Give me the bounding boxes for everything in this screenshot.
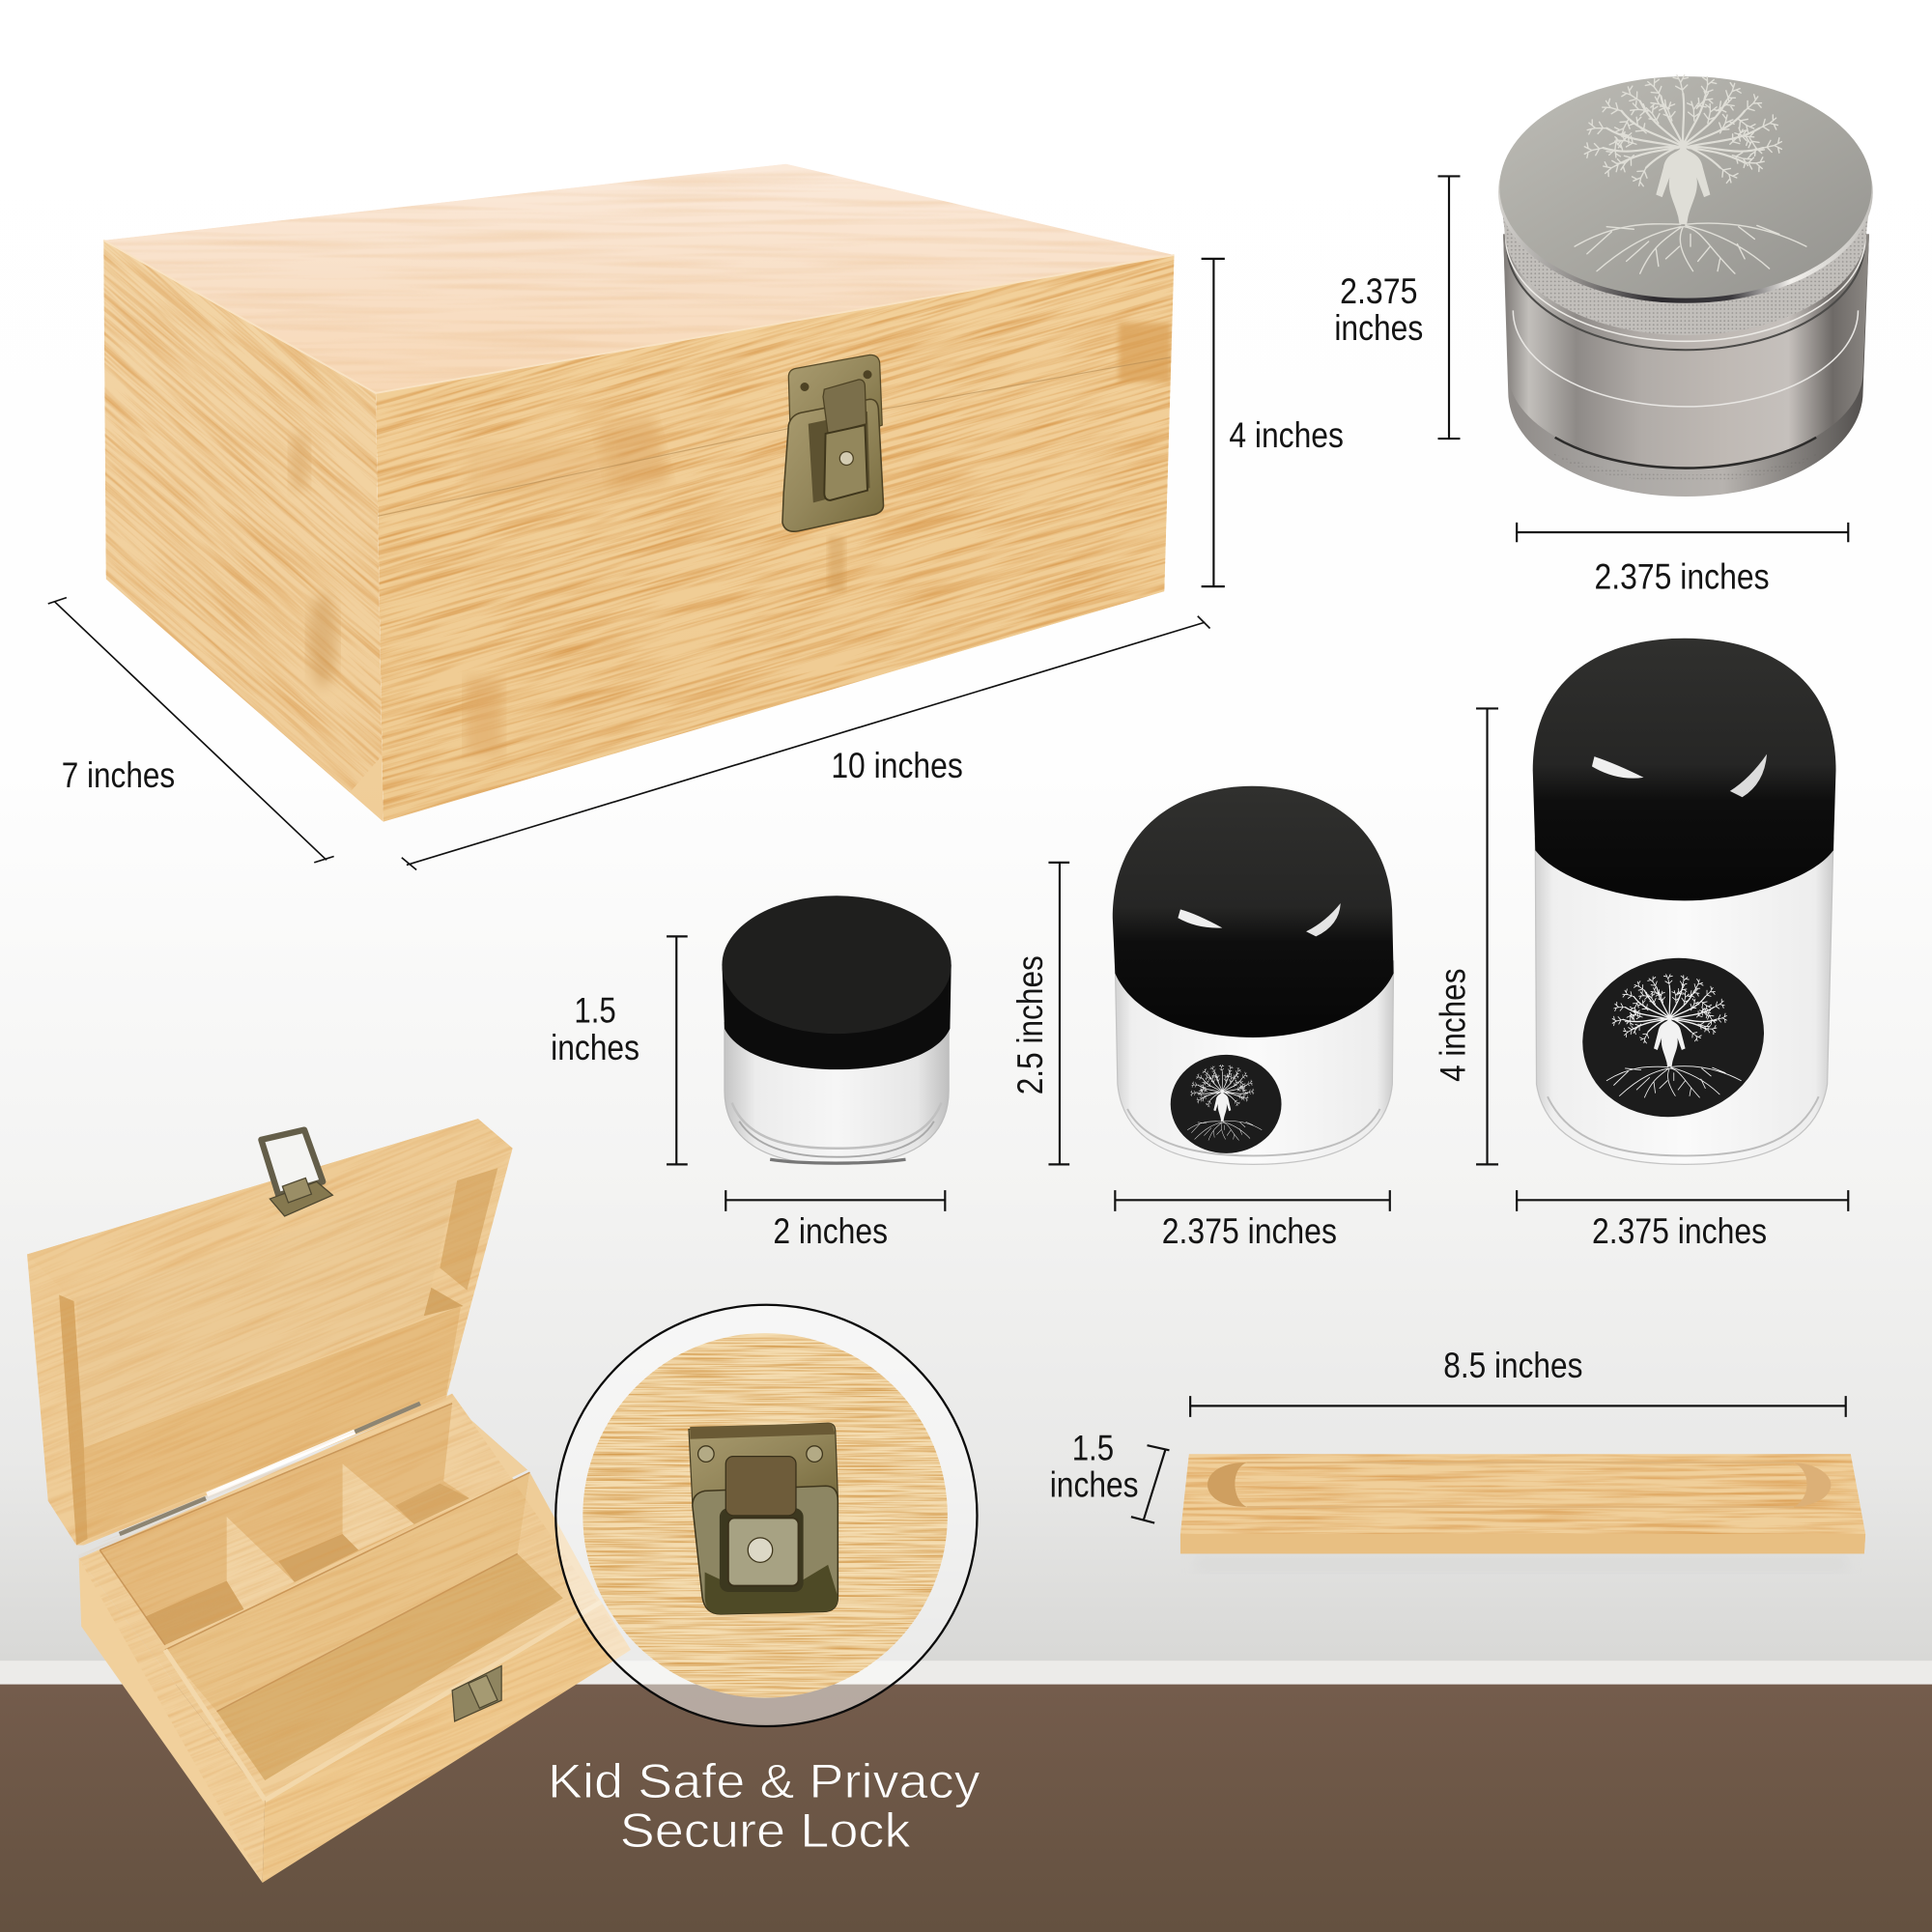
- latch body: [782, 399, 884, 531]
- magnifier bamboo: [579, 1331, 952, 1700]
- dimension: medium jar width: 2.375 inches: [1162, 1211, 1337, 1251]
- tray body: [1180, 1454, 1865, 1553]
- hinges: [120, 1404, 420, 1534]
- latch hasp: [823, 380, 867, 434]
- front lock: [452, 1665, 501, 1721]
- bamboo tray: [1180, 1454, 1866, 1553]
- skirting stripe: [0, 1661, 1932, 1685]
- closeup body wear: [705, 1565, 838, 1614]
- partition 1: [227, 1517, 295, 1609]
- tray shadow: [1195, 1555, 1848, 1573]
- long divider wall: [165, 1472, 529, 1712]
- grinder engraved tree: [1575, 75, 1806, 273]
- caption line 1: Kid Safe & Privacy: [548, 1754, 980, 1808]
- dimension: grinder width: 2.375 inches: [1595, 557, 1770, 597]
- dimension: small jar height: 1.5: [574, 991, 616, 1031]
- large jar: [1533, 639, 1836, 1164]
- dimension: small jar width: 2 inches: [773, 1211, 888, 1251]
- closed bamboo box: [0, 0, 1452, 1091]
- brown footer band: [0, 1685, 1932, 1932]
- lid rim top: [27, 1119, 513, 1301]
- compartment 3 floor: [395, 1484, 469, 1524]
- compartment 1 floor: [146, 1580, 244, 1645]
- box latch: [782, 355, 884, 531]
- medium jar cap: [1113, 786, 1394, 1037]
- small jar glass: [724, 1023, 949, 1164]
- small jar cap: [722, 965, 952, 1069]
- latch screws: [805, 375, 867, 387]
- grinder base: [1503, 234, 1869, 497]
- dimension: large jar width: [1517, 1190, 1848, 1251]
- long compartment floor: [216, 1553, 563, 1780]
- dimension: tray width: [1050, 1428, 1169, 1523]
- grinder seam lines: [1555, 438, 1816, 469]
- dimension: tray length: [1190, 1346, 1846, 1417]
- tray front edge: [1180, 1534, 1865, 1553]
- lid edge highlights: [103, 241, 1175, 393]
- medium jar highlights: [1178, 909, 1222, 928]
- closeup latch: [689, 1423, 838, 1614]
- lid inner right wall: [440, 1168, 497, 1290]
- closeup screw: [748, 1538, 773, 1562]
- large jar label: [1568, 942, 1778, 1133]
- dimension: small jar height: inches: [551, 1028, 639, 1067]
- magnifier circle: lock closeup: [555, 1305, 977, 1726]
- closeup plate: [689, 1423, 838, 1503]
- dimension: medium jar width: [1115, 1190, 1390, 1251]
- dimension: small jar height: [551, 936, 688, 1164]
- medium jar label: [1171, 1055, 1282, 1153]
- dimension: box depth: 7 inches: [62, 755, 175, 795]
- lid clasp: [261, 1130, 332, 1216]
- dimension: small jar width: [725, 1190, 945, 1251]
- hinge gap: [207, 1432, 355, 1494]
- dimension: tray length: 8.5 inches: [1443, 1346, 1582, 1385]
- latch screw: [839, 451, 853, 466]
- dimension: box depth: [48, 598, 334, 863]
- dimension: box length: 10 inches: [831, 746, 963, 785]
- caption line 2: Secure Lock: [620, 1804, 911, 1858]
- dimension: grinder height: [1334, 176, 1460, 439]
- caption: [548, 1754, 980, 1858]
- dimension: grinder height: inches: [1334, 308, 1423, 348]
- compartment 2 floor: [278, 1534, 358, 1582]
- large jar glass: [1535, 838, 1833, 1164]
- box top lid: [103, 164, 1175, 393]
- latch inner channel: [809, 412, 870, 502]
- upper compartments back wall: [99, 1404, 527, 1645]
- large jar cap: [1533, 639, 1836, 900]
- box left face: [103, 242, 383, 821]
- dimension: box length: [402, 616, 1210, 870]
- large jar highlights: [1592, 756, 1644, 779]
- closeup body: [693, 1486, 838, 1614]
- dimension: tray width: inches: [1050, 1465, 1139, 1505]
- small jar: [722, 895, 952, 1164]
- grinder mid body: [1503, 234, 1869, 467]
- medium jar: [1113, 786, 1394, 1164]
- lid inner notch: [424, 1288, 464, 1316]
- dimension: box height: 4 inches: [1229, 415, 1344, 455]
- latch lower plate: [824, 425, 867, 500]
- metal grinder: [1498, 75, 1873, 497]
- dimension: medium jar height: 2.5 inches: [1010, 955, 1050, 1094]
- dimension: tray width: 1.5: [1072, 1428, 1114, 1467]
- base front face: [263, 1602, 631, 1883]
- front rim edge: [165, 1602, 601, 1801]
- open box grain overlay: [27, 1119, 616, 1882]
- closeup hasp: [725, 1457, 796, 1516]
- lid inner panel: [76, 1180, 457, 1448]
- dimension: grinder height: 2.375: [1340, 271, 1417, 311]
- closeup inner gap: [720, 1508, 804, 1592]
- compartment 3 side wall: [443, 1404, 527, 1498]
- grinder knurled ring: [1499, 188, 1872, 335]
- dimension: large jar width: 2.375 inches: [1592, 1211, 1767, 1251]
- medium jar glass: [1115, 961, 1394, 1164]
- box front face: [376, 256, 1175, 821]
- long compartment side wall: [518, 1472, 595, 1598]
- inner edge shading: [99, 1404, 529, 1712]
- tray recess end shadows: [1208, 1463, 1247, 1507]
- grinder disc rim: [1498, 81, 1873, 303]
- latch plate: [788, 355, 882, 458]
- lid flap: [84, 1306, 461, 1539]
- grinder base knurl: [1540, 446, 1831, 481]
- base left face: [79, 1559, 265, 1883]
- magnifier ring: [555, 1305, 977, 1726]
- grinder top disc: [1499, 76, 1872, 298]
- lid left wall: [59, 1295, 88, 1545]
- tray recess edges: [1247, 1463, 1794, 1507]
- dimension: grinder width: [1517, 523, 1848, 597]
- dimension: box height: [1202, 259, 1344, 586]
- lid outer frame: [27, 1119, 513, 1545]
- dimension: large jar height: 4 inches: [1434, 969, 1473, 1082]
- closeup lower plate: [728, 1518, 799, 1586]
- dimension: medium jar height: [1010, 863, 1069, 1164]
- dimension: large jar height: [1434, 708, 1498, 1164]
- open bamboo box: [27, 1119, 631, 1883]
- base rim: [79, 1394, 601, 1801]
- partition 2: [343, 1463, 414, 1550]
